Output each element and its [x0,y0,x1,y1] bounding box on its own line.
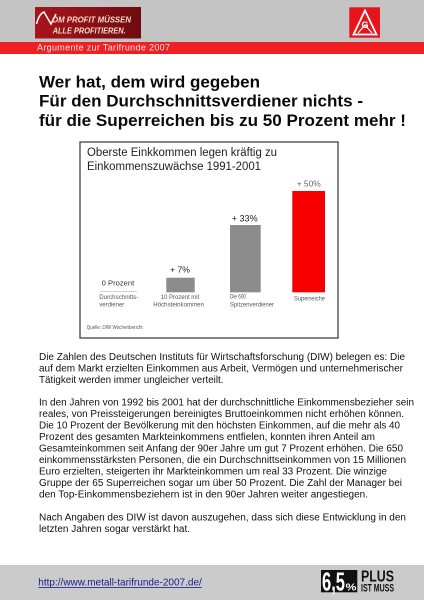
bar: 600 Spitzenverdiener +33%: + 33% [232,214,258,224]
title [39,72,406,130]
campaign logo: Vom Profit müssen alle profitieren: ALLE PROFITIEREN. [52,25,126,35]
text block: intro paragraph: Die Zahlen des Deutschen Instituts für Wirtschaftsforschung (DIW) belegen es: Die [39,352,405,363]
text block: main paragraph: Prozent des gesamten Markteinkommens entfielen, konnten ihren Anteil am [39,432,375,443]
chart heading: Oberste Einkkommen legen kräftig zu [87,147,277,159]
chart heading [87,147,277,173]
bar: Durchschnittsverdiener 0 Prozent: verdiener [99,303,124,309]
text block: main paragraph [39,397,414,500]
text block: intro paragraph: auf dem Markt erzielten Einkommen aus Arbeit, Vermögen und unternehmerischer [39,363,404,374]
chart source: Quelle: DIW Wochenbericht [87,325,143,331]
title: für die Superreichen bis zu 50 Prozent mehr ! [39,111,406,130]
icon: IG Metall logo: G [361,20,369,30]
text block: closing paragraph: Nach Angaben des DIW ist davon auszugehen, dass sich diese Entwicklung in den [39,512,406,523]
icon: IG Metall logo [349,7,380,38]
bar: 600 Spitzenverdiener +33%: Spitzenverdiener [230,303,274,309]
text block: intro paragraph [39,352,405,386]
text block: main paragraph: Gruppe der 65 Superreichen sogar um über 50 Prozent. Die Zahl der Manager bei [39,478,402,489]
slogan badge: 6,5% Plus ist Muss: IST MUSS [361,583,394,595]
bar: 10 Prozent +7%: Höchsteinkommen [153,303,204,309]
title: Wer hat, dem wird gegeben [39,72,260,91]
bar: 10 Prozent +7% [153,265,204,309]
title: Für den Durchschnittsverdiener nichts - [39,92,363,111]
chart heading: Einkommenszuwächse 1991-2001 [87,161,261,173]
text block: main paragraph: Gesamteinkommen seit Anfang der 90er Jahre um gut 7 Prozent erhöhen. Die 650 [39,443,403,454]
slogan badge: 6,5% Plus ist Muss: % [346,582,357,594]
campaign logo: Vom Profit müssen alle profitieren [35,7,141,38]
footer band [0,565,424,600]
bar: Durchschnittsverdiener 0 Prozent: Durchschnitts- [99,295,138,301]
panel: bar chart [80,142,338,338]
text block: main paragraph: In den Jahren von 1992 bis 2001 hat der durchschnittliche Einkommensbezieher sein [39,397,414,408]
slogan badge: 6,5% Plus ist Muss: PLUS [361,569,394,586]
bar: Durchschnittsverdiener 0 Prozent [99,279,138,309]
slogan badge: 6,5% Plus ist Muss [321,566,394,596]
text block: main paragraph: einkommensstärksten Personen, die ein Durchschnittseinkommen von 15 Millionen [39,455,406,466]
bar: Durchschnittsverdiener 0 Prozent: 0 Prozent [102,279,135,288]
campaign logo: Vom Profit müssen alle profitieren: OM PROFIT MÜSSEN [52,15,132,25]
bar: Superreiche +50%: Superreiche [294,297,326,303]
footer link: http://www.metall-tarifrunde-2007.de/ [38,578,202,589]
bar: 600 Spitzenverdiener +33%: Die 600 [230,294,247,300]
slogan badge: 6,5% Plus ist Muss: 6,5 [322,566,345,596]
text block: closing paragraph: letzten Jahren sogar verstärkt hat. [39,524,190,535]
header band [0,0,424,54]
text block: main paragraph: reales, von Preissteigerungen bereinigtes Bruttoeinkommen nicht erhöhen können. [39,409,404,420]
bar: 600 Spitzenverdiener +33% [230,214,274,309]
bar: Superreiche +50%: + 50% [297,179,321,189]
text block: main paragraph: Euro erzielten, steigerten ihr Markteinkommen um real 33 Prozent. Die winzige [39,466,387,477]
header subtitle: Argumente zur Tarifrunde 2007 [37,42,170,52]
text block: intro paragraph: Tätigkeit werden immer ungleicher verteilt. [39,375,224,386]
bar: 10 Prozent +7%: + 7% [170,265,190,275]
text block: closing paragraph [39,512,406,535]
text block: main paragraph: den Top-Einkommensbeziehern ist in den 90er Jahren weiter angestiegen. [39,489,368,500]
bar: 10 Prozent +7%: 10 Prozent mit [161,295,200,301]
bar: Superreiche +50% [292,179,326,303]
text block: main paragraph: Die 10 Prozent der Bevölkerung mit den höchsten Einkommen, auf die mehr als 40 [39,420,400,431]
